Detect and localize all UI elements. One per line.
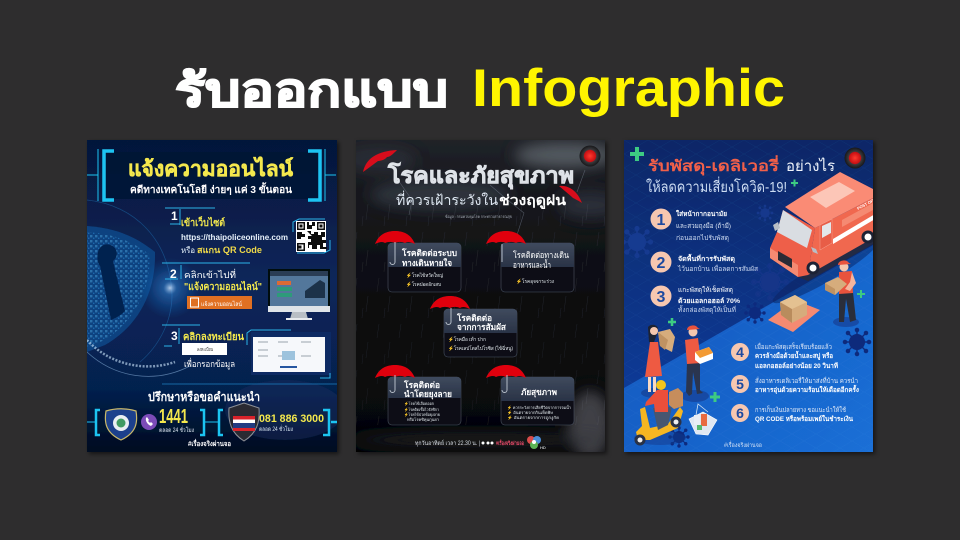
lightning: [398, 170, 585, 238]
contact bar: ตลอด 24 ชั่วโมง: [159, 426, 194, 434]
step 3: แกะพัสดุให้เช็ดพัสดุ: [678, 285, 733, 294]
hotline number: 1441: [159, 406, 188, 428]
step 2: 2: [170, 267, 177, 281]
card: contact diseases: [430, 296, 517, 357]
step 1: หรือ: [181, 246, 195, 255]
step 5: 5: [736, 376, 744, 392]
icon: QR code: [293, 219, 330, 253]
step 2: 2: [657, 255, 666, 272]
step 2: [162, 263, 262, 293]
red umbrella top right: [559, 186, 582, 203]
card: health hazards: ภัยสุขภาพ: [521, 387, 557, 398]
panel: rainy season health poster: ช่วงฤดูฝน: [499, 192, 566, 209]
contact bar: ตลอด 24 ชั่วโมง: [259, 425, 293, 433]
truck: [768, 172, 882, 311]
footer: ทุกวันอาทิตย์ เวลา 22.30 น. |: [415, 439, 480, 447]
heading: รับพัสดุ-เดลิเวอรี่: [648, 155, 780, 176]
record button icon: [580, 146, 600, 166]
title: รับออกแบบ: [175, 64, 448, 116]
icon: viber phone: [141, 414, 157, 430]
card: respiratory diseases: ⚡โรคปอดอักเสบ: [406, 281, 441, 288]
footer: [415, 436, 546, 450]
card: mosquito-borne diseases: [375, 365, 461, 425]
card: respiratory diseases: โรคติดต่อระบบ: [401, 248, 457, 258]
subheading: ให้ลดความเสี่ยงโควิด-19!: [646, 176, 787, 196]
delivery man with food tray: [681, 325, 713, 402]
phone number: 081 886 3000: [259, 413, 324, 425]
step 2: จัดพื้นที่การรับพัสดุ: [678, 253, 735, 263]
orange button: [187, 296, 252, 309]
registration form screenshot: [247, 330, 331, 378]
card: digestive diseases: โรคติดต่อทางเดิน: [513, 250, 569, 260]
source note: ข้อมูล : กรมควบคุมโรค กระทรวงสาธารณสุข: [445, 214, 512, 220]
step 3: ลงทะเบียน: [197, 346, 213, 353]
step 6: 6: [736, 405, 744, 421]
step 5: [731, 375, 859, 394]
rain: [356, 200, 605, 425]
step 4: ควรล้างมือด้วยน้ำและสบู่ หรือ: [755, 350, 833, 361]
card: mosquito-borne diseases: หรือโรคชิคุนกุนยา: [407, 417, 439, 423]
step 3: [162, 325, 244, 370]
header band: [103, 152, 321, 199]
card: mosquito-borne diseases: ⚡โรคติดเชื้อไวรัสซิกา: [404, 405, 439, 412]
step 1: [165, 208, 288, 255]
grocery basket: [689, 404, 717, 435]
hashtag: #เรื่องจริงผ่านจอ: [188, 438, 231, 448]
step 1: ใส่หน้ากากอนามัย: [676, 209, 727, 218]
heading: อย่างไร: [786, 157, 835, 175]
step 5: สั่งอาหารเดลิเวอรี่ให้มาส่งที่บ้าน ควรนำ: [755, 376, 858, 385]
card: respiratory diseases: [375, 231, 461, 292]
icon: PCT badge: [229, 403, 259, 441]
card: contact diseases: จากการสัมผัส: [457, 322, 507, 332]
hashtag: #เรื่องจริงผ่านจอ: [724, 441, 762, 449]
graphic: cyber shield with keyhole: [87, 200, 345, 440]
heading: consult: [162, 384, 337, 385]
heading: แจ้งความออนไลน์: [128, 156, 294, 181]
title: Infographic: [472, 59, 785, 118]
step 1: ก่อนออกไปรับพัสดุ: [676, 234, 729, 242]
step 4: [731, 342, 838, 370]
card: health hazards: ⚡ ควรระวังการเสียชีวิตจากการจมน้ำ: [507, 403, 571, 410]
red umbrella top left: [363, 150, 397, 172]
step 1: เข้าเว็บไซต์: [181, 215, 225, 229]
panel: online police report poster: [87, 140, 345, 452]
card: respiratory diseases: ทางเดินหายใจ: [402, 258, 452, 268]
step 3: ทั้งกล่องพัสดุให้เป็นที่: [678, 305, 736, 314]
panel: parcel delivery covid poster: [622, 140, 882, 452]
step 1: [650, 208, 731, 242]
truck: POST OFFICE: [856, 194, 882, 211]
step 3: ด้วยแอลกอฮอล์ 70%: [678, 296, 740, 305]
step 4: แอลกอฮอล์อย่างน้อย 20 วินาที: [755, 361, 838, 370]
step 1: 1: [657, 212, 666, 229]
card: mosquito-borne diseases: ⚡โรคไข้ปวดข้อยุงลาย: [404, 412, 440, 418]
step 1: https://thaipoliceonline.com: [181, 233, 288, 242]
scooter rider: [634, 380, 686, 446]
footer: #เรื่องจริงผ่านจอ: [496, 439, 524, 447]
bracket left: [87, 149, 114, 201]
heading: โรคและภัยสุขภาพ: [387, 162, 574, 190]
step 3: เพื่อกรอกข้อมูล: [184, 357, 235, 370]
card: digestive diseases: ⚡โรคอุจจาระร่วง: [516, 278, 555, 285]
icons: virus particles: [622, 205, 871, 447]
subheading: คดีทางเทคโนโลยี ง่ายๆ แค่ 3 ขั้นตอน: [130, 182, 292, 196]
step 4: 4: [736, 344, 744, 360]
parcel on mat: [768, 295, 820, 332]
step 6: QR CODE หรือพร้อมเพย์ในชำระเงิน: [755, 414, 854, 423]
card: contact diseases: โรคติดต่อ: [456, 313, 492, 323]
step 3: [650, 285, 740, 314]
step 5: อาหารอุ่นด้วยความร้อนให้เดือดอีกครั้ง: [755, 384, 859, 394]
storm clouds: [356, 140, 605, 452]
bracket right: [308, 149, 336, 201]
title: [175, 59, 785, 118]
step 3: คลิกลงทะเบียน: [183, 331, 244, 343]
step 3: 3: [171, 329, 178, 343]
card: contact diseases: ⚡โรคมือ เท้า ปาก: [448, 336, 486, 343]
card: health hazards: ⚡ อันตรายจากการถูกงูกัด: [507, 415, 559, 421]
step 6: การเก็บเงินปลายทาง ขอแนะนำให้ใช้: [755, 405, 847, 414]
card: mosquito-borne diseases: โรคติดต่อ: [403, 380, 440, 390]
card: mosquito-borne diseases: ⚡โรคไข้เลือดออก: [404, 401, 435, 406]
panel: online police report poster: ปรึกษาหรือขอคำแนะนำ: [148, 390, 260, 404]
step 4: เมื่อแกะพัสดุเสร็จเรียบร้อยแล้ว: [755, 342, 832, 351]
card: contact diseases: ⚡โรคเลปโตสไปโรซิส (ไข้ฉี่หนู): [448, 345, 513, 352]
card: mosquito-borne diseases: นำโดยยุงลาย: [404, 389, 452, 400]
step 2: คลิกเข้าไปที่: [184, 268, 236, 280]
orange button: แจ้งความออนไลน์: [201, 300, 242, 308]
subheading: ที่ควรเฝ้าระวังใน: [396, 191, 498, 208]
step 1: สแกน QR Code: [197, 245, 262, 255]
card: respiratory diseases: ⚡โรคไข้หวัดใหญ่: [406, 272, 443, 279]
monitor screenshot: [268, 269, 330, 320]
step 2: ไว้นอกบ้าน เพื่อลดการสัมผัส: [677, 264, 758, 273]
icon: channel logo: HD: [540, 445, 546, 450]
delivery man carrying box: [825, 260, 859, 327]
card: health hazards: [486, 365, 574, 425]
step 1: 1: [171, 209, 178, 223]
step 2: "แจ้งความออนไลน์": [184, 280, 262, 293]
woman holding box: [641, 325, 675, 398]
heading: [648, 155, 835, 176]
record button icon: [844, 148, 866, 168]
contact bar: [87, 403, 337, 441]
step 6: [731, 404, 854, 423]
card: digestive diseases: อาหารและน้ำ: [513, 259, 551, 270]
icons: green plus: [630, 147, 865, 402]
card: health hazards: ⚡ อันตรายจากกินเห็ดพิษ: [507, 409, 553, 415]
step 1: และสวมถุงมือ (ถ้ามี): [676, 222, 731, 230]
icon: police badge: [105, 409, 137, 440]
infographic canvas: [87, 68, 876, 455]
step 2: [650, 252, 758, 273]
card: digestive diseases: [486, 231, 574, 292]
step 3: 3: [657, 289, 666, 306]
panel: rainy season health poster: [356, 140, 608, 455]
